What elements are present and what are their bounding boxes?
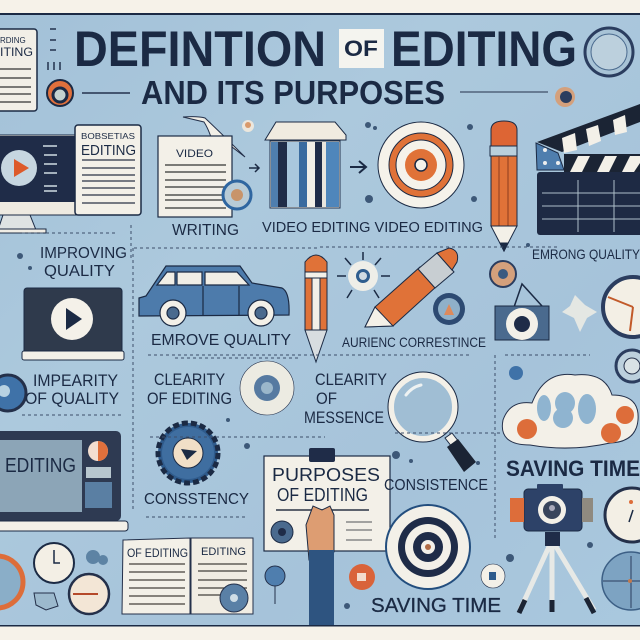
icon: purposes of editing clipboard (264, 448, 390, 551)
icon: small bubble (86, 550, 108, 565)
icon: document top-left: RDING (0, 36, 26, 45)
decoration: scattered small marks (17, 122, 593, 609)
icon: pin (265, 566, 285, 604)
label: impearity of quality: IMPEARITY (33, 371, 118, 390)
label: clearity of editing: OF EDITING (147, 390, 232, 408)
label: improving quality: IMPROVING (40, 245, 127, 262)
icon: writing document (158, 117, 254, 217)
icon: blue dot (509, 366, 523, 380)
icon: clock with red hand (69, 574, 109, 614)
icon: white sparkle (562, 295, 597, 332)
icon: small link symbol (34, 593, 58, 610)
title: EDITING (391, 21, 577, 77)
label: saving time lower: SAVING TIME (371, 595, 501, 617)
title: OF (344, 36, 378, 61)
label: clearity of messence: MESSENCE (304, 409, 384, 427)
icon: clapperboard (536, 104, 640, 235)
icon: orange badge (349, 564, 375, 590)
icon: editing laptop (0, 431, 128, 531)
icon: document top-left: ITING (0, 45, 33, 59)
icon: small white circle (481, 564, 505, 588)
icon: clock right (603, 277, 640, 337)
icon: monitor with play video and editing page: BOBSETIAS (81, 132, 135, 141)
label: clearity of messence: OF (316, 390, 337, 408)
label: clearity of messence: CLEARITY (315, 371, 387, 389)
label: consistence: CONSISTENCE (384, 477, 488, 494)
icon: badge dot (433, 293, 465, 325)
icon: cloud (502, 374, 638, 448)
dashed dividers (22, 225, 590, 540)
arrow: book to target (350, 161, 366, 173)
icon: gear (158, 423, 218, 483)
icon: clock left (34, 543, 74, 583)
icon: magnifier lens top right (585, 28, 633, 76)
icon: blue compass dial (602, 552, 640, 610)
icon: writing document: VIDEO (176, 148, 213, 160)
label: consstency: CONSSTENCY (144, 491, 249, 508)
icon: monitor with play video and editing page (0, 125, 141, 233)
icon: book columns (265, 122, 346, 208)
icon: open book (122, 538, 253, 614)
icon: open book: OF EDITING (127, 546, 188, 560)
icon: hand with pen (306, 506, 334, 625)
icon: clock lower right (605, 488, 640, 542)
icon: play laptop (22, 288, 124, 360)
icon: editing laptop: EDITING (5, 455, 76, 477)
icon: open book: EDITING (201, 546, 246, 558)
icon: small marks and orange ring (47, 29, 130, 106)
icon: car (139, 266, 289, 326)
icon: document top-left (0, 29, 37, 111)
icon: diagonal pencil (365, 248, 458, 327)
label: clearity of editing (147, 371, 232, 408)
label: clearity of messence (304, 371, 387, 427)
icon: video camera tripod (510, 484, 594, 613)
icon: orange ring small (490, 261, 516, 287)
label: impearity of quality (25, 371, 119, 408)
icon: bullseye target (386, 505, 470, 589)
icon: upright pencil top (490, 121, 517, 251)
label: video editing twice: VIDEO EDITING VIDEO EDITING (262, 219, 483, 236)
title: DEFINTION (74, 21, 326, 77)
label: emrove quality: EMROVE QUALITY (151, 332, 291, 349)
arrow: writing to book (249, 164, 259, 172)
label: improving quality: QUALITY (44, 263, 115, 280)
icon: monitor with play video and editing page: EDITING (81, 142, 136, 159)
label: improving quality (40, 245, 127, 280)
icon: purposes of editing clipboard: OF EDITING (277, 485, 368, 505)
icon: blue record disc left (0, 375, 26, 411)
icon: white disc (240, 361, 294, 415)
label: writing: WRITING (172, 222, 239, 239)
icon: orange target (378, 122, 464, 208)
title (74, 21, 577, 111)
icon: pencil middle (305, 255, 327, 362)
icon: purposes of editing clipboard: PURPOSES (272, 465, 380, 485)
label: aurienc correstince: AURIENC CORRESTINCE (342, 334, 486, 350)
title: AND ITS PURPOSES (141, 74, 445, 111)
icon: clock ring upper right (616, 350, 640, 382)
decoration: small emblem (460, 87, 575, 107)
label: clearity of editing: CLEARITY (154, 371, 225, 389)
label: impearity of quality: OF QUALITY (25, 389, 119, 408)
icon: sun burst (337, 252, 390, 298)
icon: magnifying glass (388, 372, 476, 472)
icon: camera small (495, 284, 549, 340)
icon: large orange ring bottom left (0, 556, 23, 608)
